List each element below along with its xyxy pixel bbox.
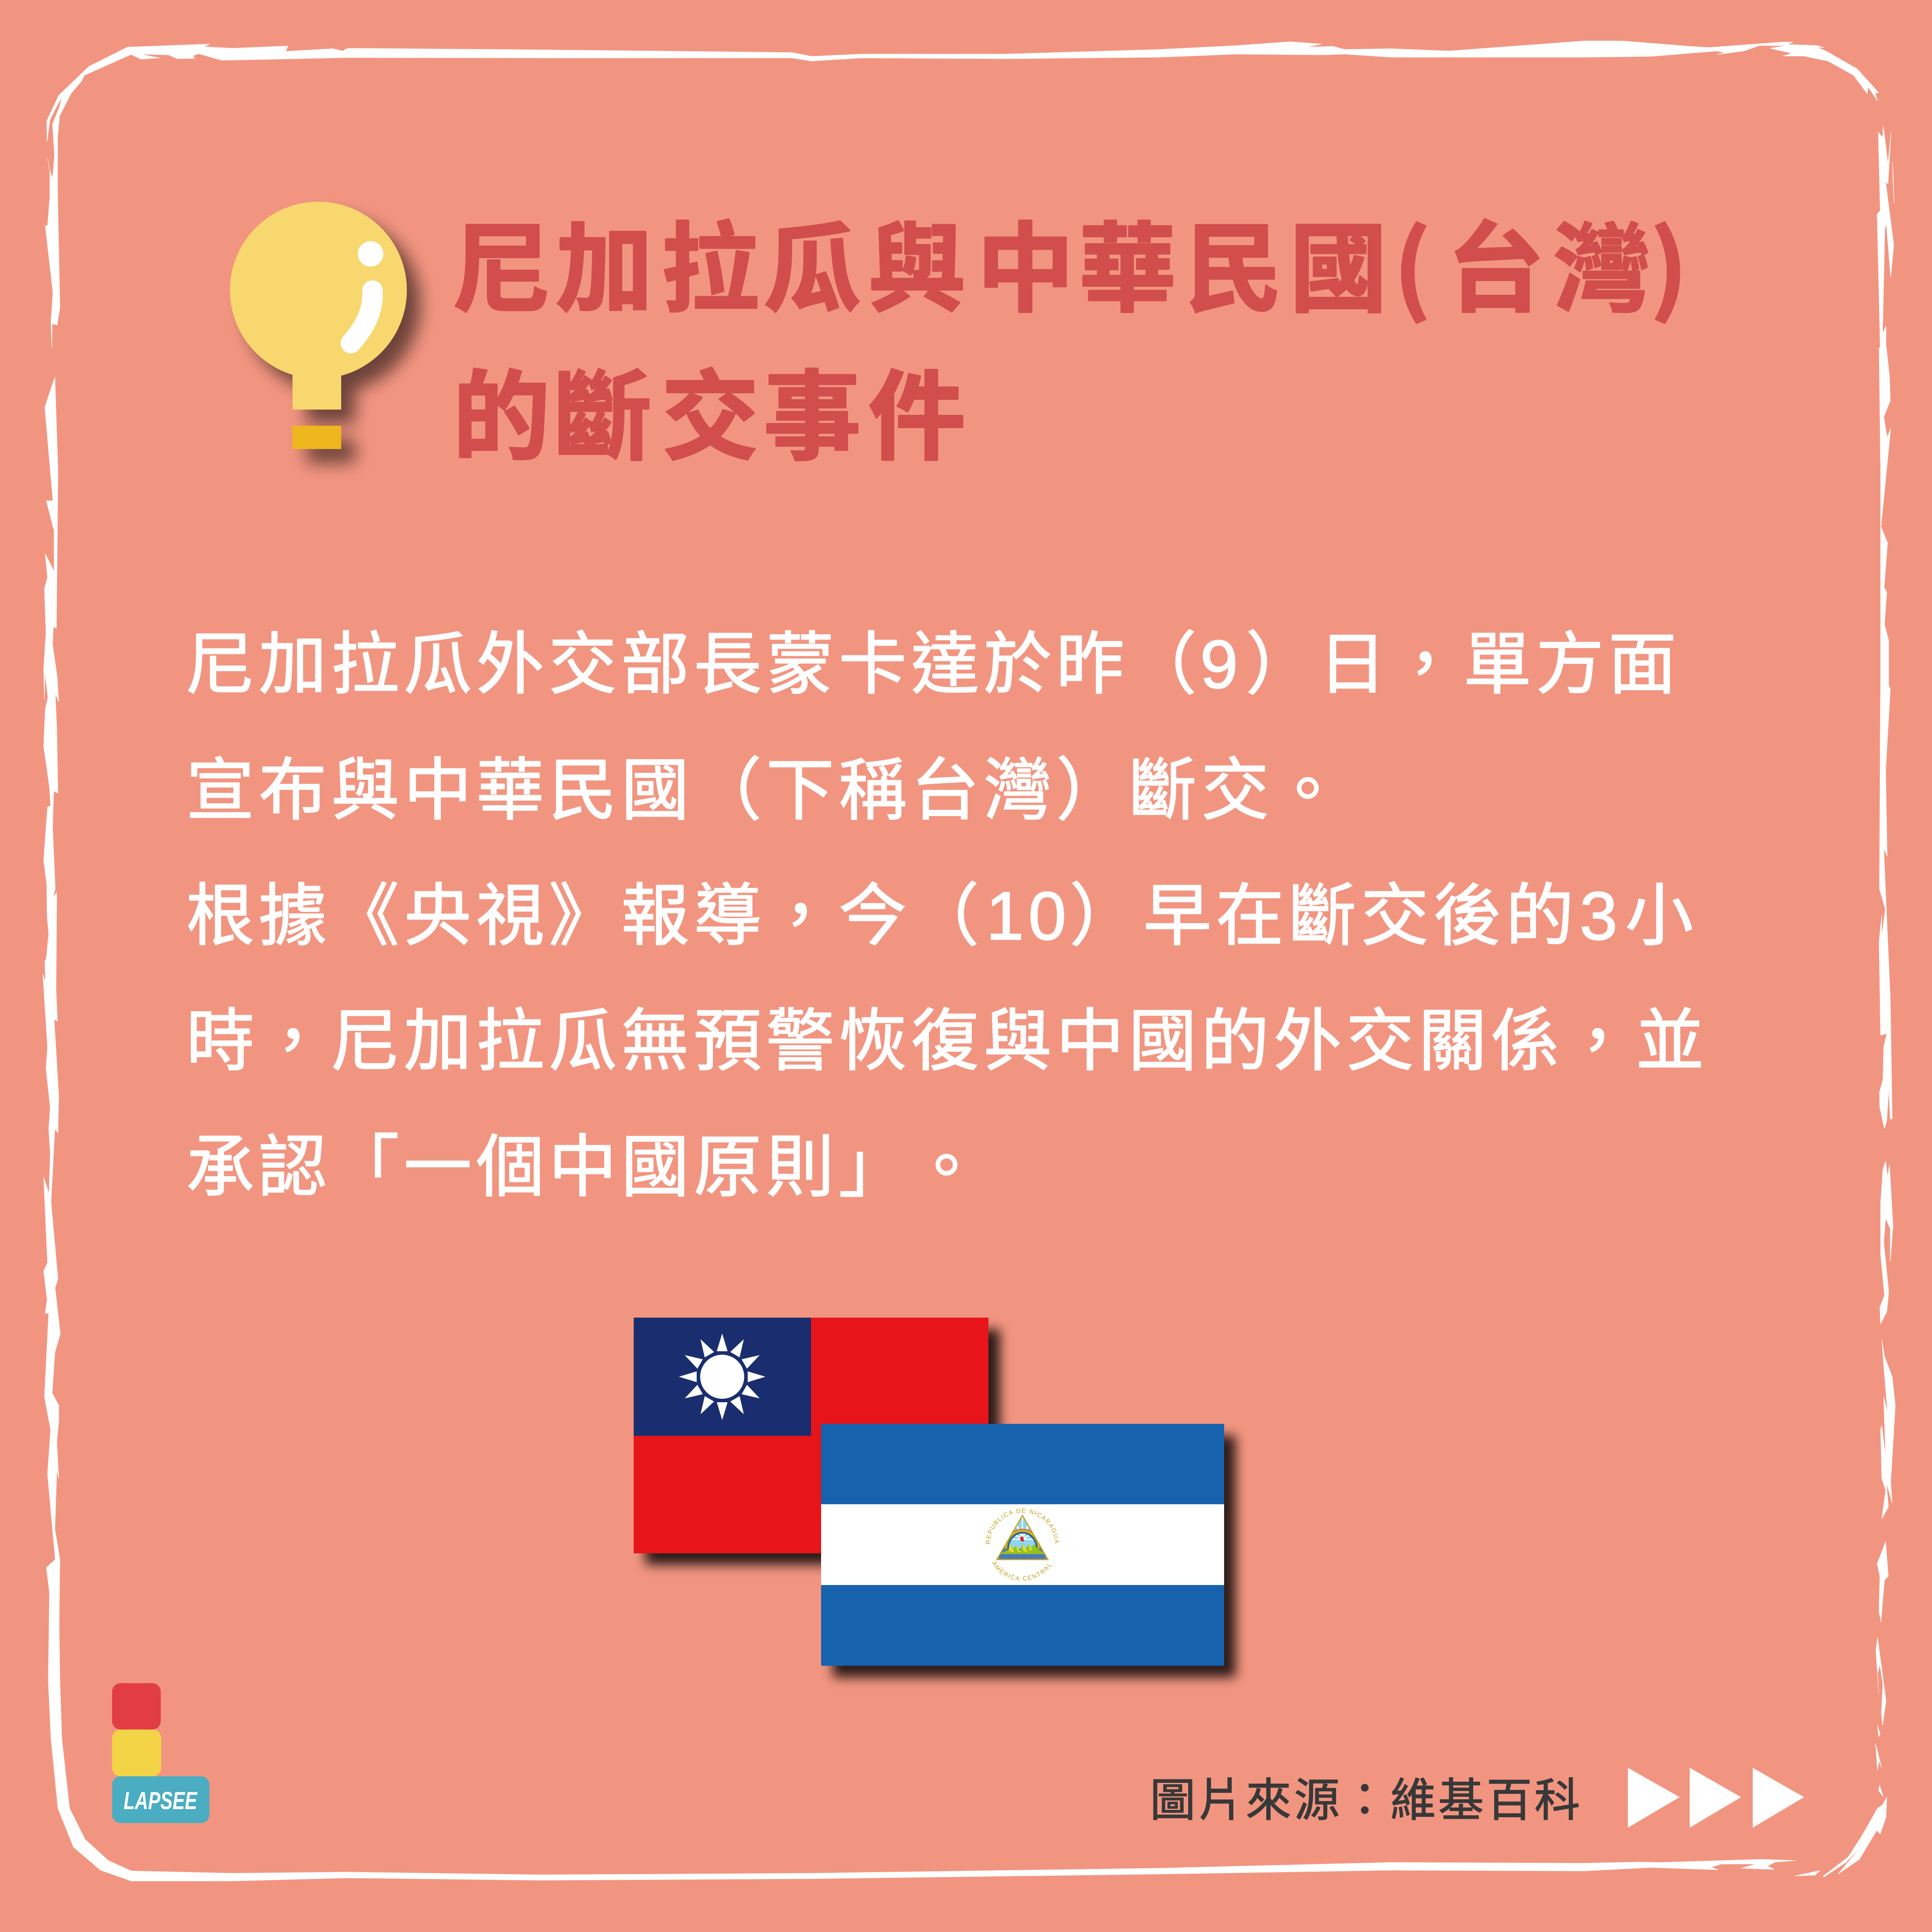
title (453, 190, 1687, 480)
body text: ） (1070, 878, 1142, 954)
body text: 時，尼加拉瓜無預警恢復與中國的外交關係，並 (186, 1003, 1709, 1079)
body text: 尼加拉瓜外交部長蒙卡達於昨（ (186, 627, 1201, 702)
body text: 宣布與中華民國（下稱台灣）斷交。 (186, 753, 1346, 828)
body text: ） (1246, 627, 1318, 702)
body text: 。 (912, 1129, 985, 1205)
body text: 3 (1580, 878, 1617, 954)
flag: Nicaragua (821, 1424, 1236, 1677)
body text: 承認「一個中國原則」 (186, 1129, 911, 1205)
body text: 日，單方面 (1318, 627, 1681, 702)
title: 的斷交事件 (453, 338, 966, 480)
flag: Taiwan (ROC) (634, 1318, 1000, 1565)
body text: 9 (1200, 627, 1238, 702)
body text (186, 627, 1709, 1205)
body text: 早在斷交後的 (1143, 878, 1578, 954)
icon: light bulb with exclamation (230, 202, 420, 463)
body text: 10 (986, 878, 1071, 954)
body text: 小 (1625, 878, 1698, 954)
logo: LAPSEE (112, 1683, 209, 1823)
arrows: next page (1628, 1768, 1804, 1828)
body text: 根據《央視》報導，今（ (186, 878, 984, 954)
title: 尼加拉瓜與中華民國(台灣) (453, 190, 1687, 332)
image source caption: 圖片來源：維基百科 (1150, 1775, 1580, 1826)
coat of arms (985, 1508, 1060, 1582)
coat of arms: AMERICA CENTRAL (990, 1560, 1053, 1582)
coat of arms: REPUBLICA DE NICARAGUA (985, 1508, 1060, 1544)
logo: LAPSEE: LAPSEE (124, 1787, 198, 1815)
